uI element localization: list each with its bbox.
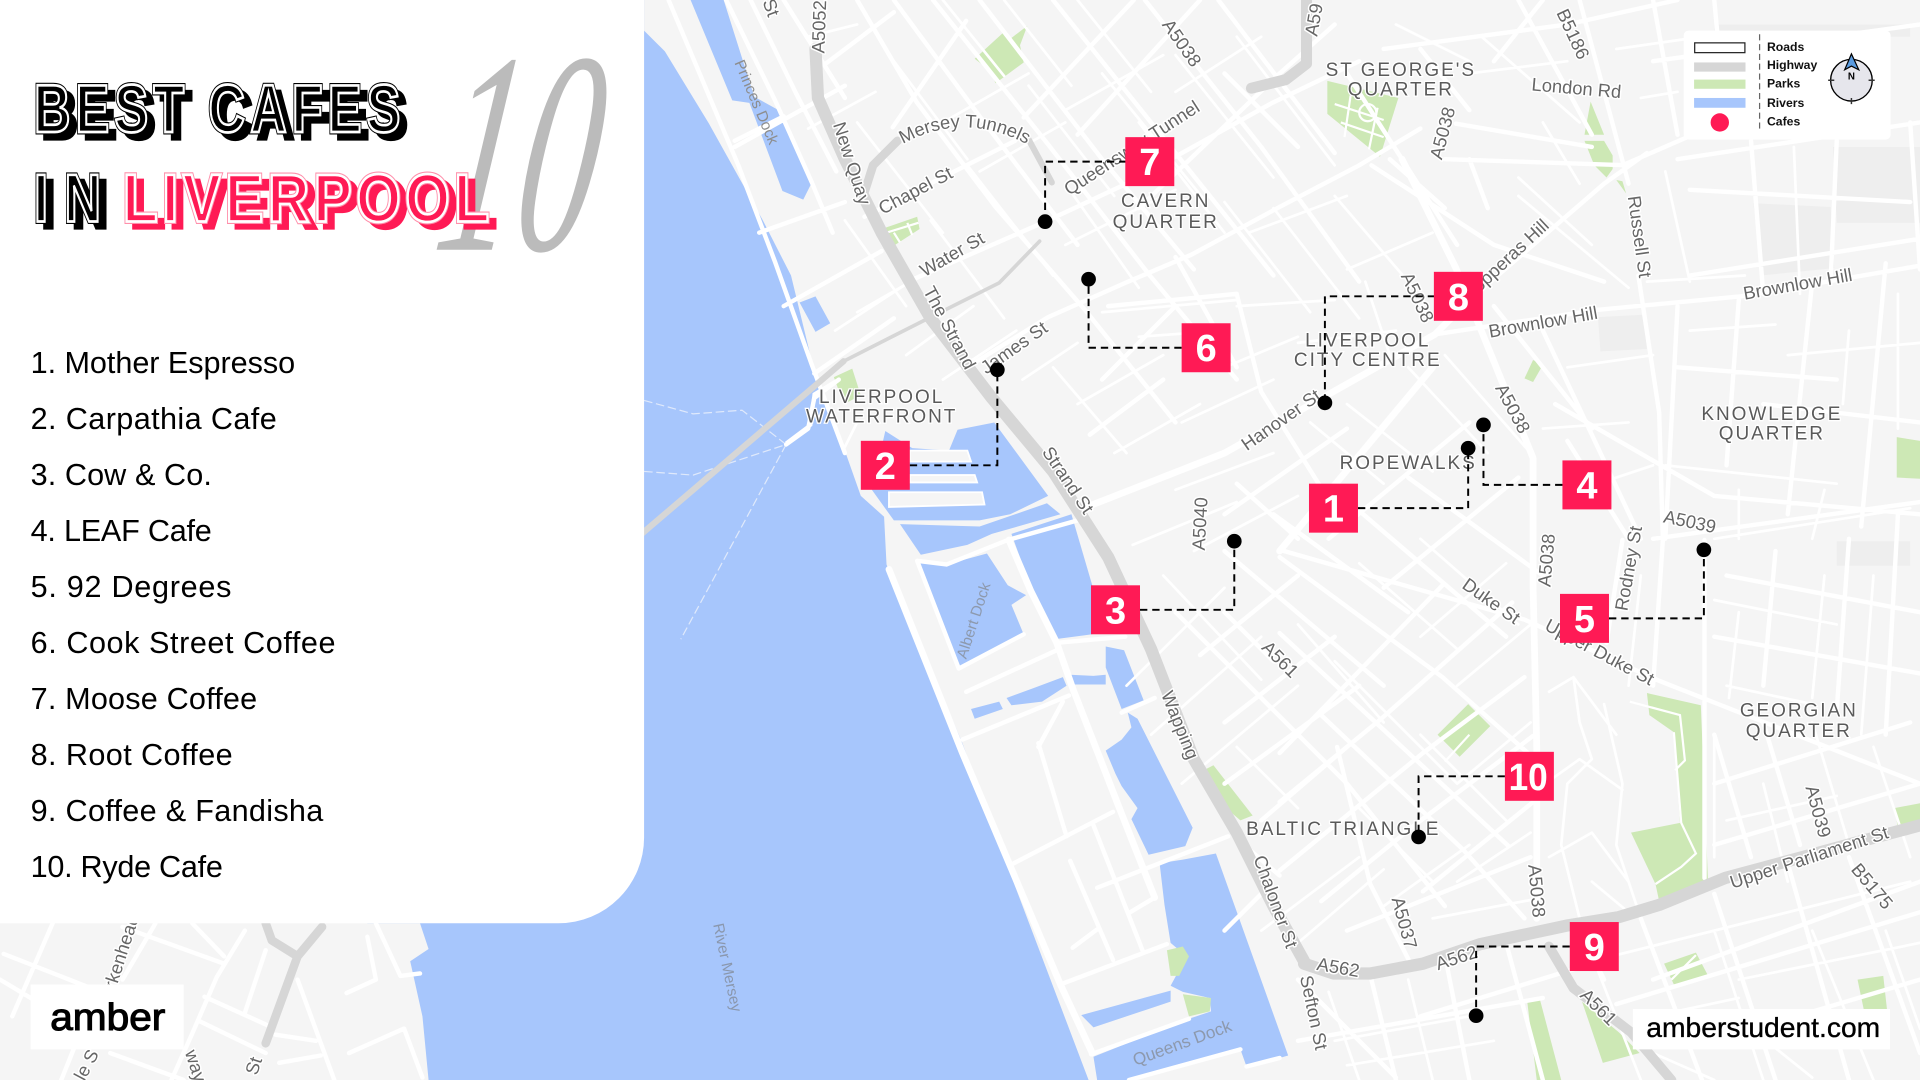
parks — [834, 26, 1920, 1080]
street labels: A5038 — [1397, 269, 1438, 326]
street labels: A5038 — [1158, 15, 1206, 71]
street labels: A5038 — [1524, 864, 1550, 918]
cafe marker 5 — [1560, 542, 1711, 643]
street labels: Brownlow Hill — [1487, 302, 1599, 342]
street labels: A5039 — [1662, 506, 1718, 537]
area labels: ROPEWALKS — [1340, 453, 1477, 474]
area labels: LIVERPOOL — [1305, 331, 1430, 352]
cafe list: 7. Moose Coffee — [31, 682, 257, 716]
legend — [1684, 31, 1891, 140]
cafe list: 3. Cow & Co. — [31, 458, 212, 492]
area labels: GEORGIAN — [1740, 700, 1858, 721]
street labels: Sefton St — [1296, 973, 1332, 1052]
title: LIVERPOOL — [123, 161, 489, 237]
area labels: QUARTER — [1746, 721, 1852, 742]
logo: amber: amber — [50, 997, 165, 1039]
title: BEST CAFES — [41, 77, 408, 153]
ferry routes — [644, 400, 786, 639]
street labels: Duke St — [1459, 573, 1524, 628]
area labels: CAVERN — [1121, 191, 1210, 212]
legend: Highway — [1767, 58, 1817, 72]
area labels: KNOWLEDGE — [1701, 404, 1842, 425]
legend: Roads — [1767, 40, 1805, 54]
title: IN — [34, 161, 101, 236]
street labels: Queens Dock — [1130, 1015, 1235, 1070]
street labels: St — [241, 1054, 266, 1077]
cafe list: 10. Ryde Cafe — [31, 850, 223, 884]
icon: north compass — [1828, 54, 1875, 104]
street labels: Mersey Tunnels — [897, 114, 1031, 144]
legend: Cafes — [1767, 115, 1800, 129]
street labels: A5038 — [1425, 105, 1459, 161]
cafe marker 7: 7 — [1139, 142, 1160, 184]
legend: Rivers — [1767, 96, 1805, 110]
area labels: WATERFRONT — [806, 406, 957, 427]
website url: amberstudent.com — [1646, 1012, 1880, 1043]
title: LIVERPOOL — [130, 167, 496, 243]
street labels: B5175 — [1847, 859, 1897, 913]
street labels: Princes Dock — [731, 58, 782, 147]
dock piers — [889, 451, 984, 507]
logo: amber — [31, 984, 184, 1049]
cafe list: 8. Root Coffee — [31, 738, 233, 772]
street labels: A562 — [1315, 953, 1361, 981]
area labels — [806, 60, 1858, 840]
cafe marker 10: 10 — [1509, 757, 1548, 799]
area labels: CITY CENTRE — [1294, 350, 1442, 371]
street labels: Upper Duke St — [1542, 614, 1658, 689]
title: IN — [34, 161, 101, 236]
cafe marker 6 — [1081, 272, 1231, 372]
street labels: A561 — [1258, 636, 1303, 682]
title: BEST CAFES — [34, 71, 400, 147]
area labels: QUARTER — [1113, 212, 1219, 233]
street labels: A5038 — [1533, 533, 1559, 588]
cafe marker 2: 2 — [875, 446, 896, 488]
street labels: A59 — [1300, 2, 1327, 38]
cafe marker 8 — [1318, 272, 1483, 410]
street labels: A5052 — [807, 0, 830, 54]
cafe marker 8: 8 — [1448, 277, 1469, 319]
street labels: Birkenhead — [94, 912, 143, 1007]
legend: Parks — [1767, 77, 1800, 91]
cafe marker 3: 3 — [1105, 590, 1126, 632]
cafe marker 10 — [1411, 752, 1554, 844]
title: BEST CAFES — [34, 71, 400, 147]
cafe marker 2 — [861, 362, 1005, 490]
street labels: A5037 — [1388, 894, 1422, 951]
street labels: James St — [976, 317, 1051, 378]
street labels: A5038 — [1491, 380, 1535, 437]
street labels: Wapping — [1157, 688, 1203, 762]
street labels: Chapel St — [875, 162, 956, 218]
decorative number 10: 10 — [422, 0, 624, 312]
panel: title and cafe list — [0, 0, 644, 923]
street labels: Brownlow Hill — [1742, 264, 1854, 304]
street labels: The Strand — [919, 283, 980, 373]
cafe marker 4 — [1476, 418, 1611, 509]
cafe marker 4: 4 — [1576, 465, 1597, 507]
title: LIVERPOOL — [123, 161, 489, 237]
street labels: River Mersey — [709, 922, 745, 1014]
river and docks — [367, 0, 1288, 1080]
street labels: Queensway Tunnel — [1060, 96, 1203, 199]
street labels: New Quay — [829, 119, 876, 208]
area labels: QUARTER — [1719, 424, 1825, 445]
street labels: Copperas Hill — [1458, 214, 1553, 305]
street labels: Water St — [916, 227, 988, 281]
street labels: Upper Parliament St — [1727, 822, 1891, 893]
area labels: BALTIC TRIANGLE — [1246, 819, 1440, 840]
street labels: A561 — [1576, 984, 1621, 1029]
cafe marker 1 — [1309, 441, 1476, 533]
minor roads — [808, 0, 1920, 1080]
area labels: ST GEORGE'S — [1326, 60, 1476, 81]
street labels: Hanover St — [1237, 385, 1324, 455]
main arterial roads — [889, 159, 1537, 1053]
street labels: A5040 — [1188, 497, 1212, 551]
street labels: Chaloner St — [1249, 852, 1302, 951]
park paths — [887, 96, 1696, 980]
street labels: Russell St — [1624, 194, 1656, 279]
street labels: A562 — [1433, 941, 1480, 974]
website url — [1633, 1009, 1890, 1049]
cafe list: 4. LEAF Cafe — [31, 514, 212, 548]
title: IN — [41, 167, 108, 242]
bridge road — [786, 381, 836, 443]
street labels: B5186 — [1553, 5, 1594, 62]
cafe list: 9. Coffee & Fandisha — [31, 794, 324, 828]
street labels: London Rd — [1531, 73, 1622, 102]
street labels: Rodney St — [1611, 524, 1646, 612]
area labels: QUARTER — [1348, 80, 1454, 101]
cafe marker 9 — [1469, 922, 1619, 1023]
cafe marker 5: 5 — [1574, 599, 1595, 641]
cafe list: 6. Cook Street Coffee — [31, 626, 336, 660]
area labels: LIVERPOOL — [819, 387, 944, 408]
cafe list — [31, 346, 336, 884]
cafe marker 9: 9 — [1584, 927, 1605, 969]
cafe list: 2. Carpathia Cafe — [31, 402, 277, 436]
cafe marker 7 — [1038, 137, 1174, 229]
title — [34, 71, 496, 243]
cafe list: 1. Mother Espresso — [31, 346, 295, 380]
street labels: Albert Dock — [954, 580, 994, 661]
cafe list: 5. 92 Degrees — [31, 570, 231, 604]
street labels: Strand St — [1038, 442, 1098, 518]
street labels: A5039 — [1802, 783, 1836, 840]
cafe marker 6: 6 — [1196, 328, 1217, 370]
cafe marker 1: 1 — [1323, 489, 1344, 531]
cafe marker 3 — [1091, 534, 1242, 634]
icon: north compass: N — [1848, 72, 1855, 83]
